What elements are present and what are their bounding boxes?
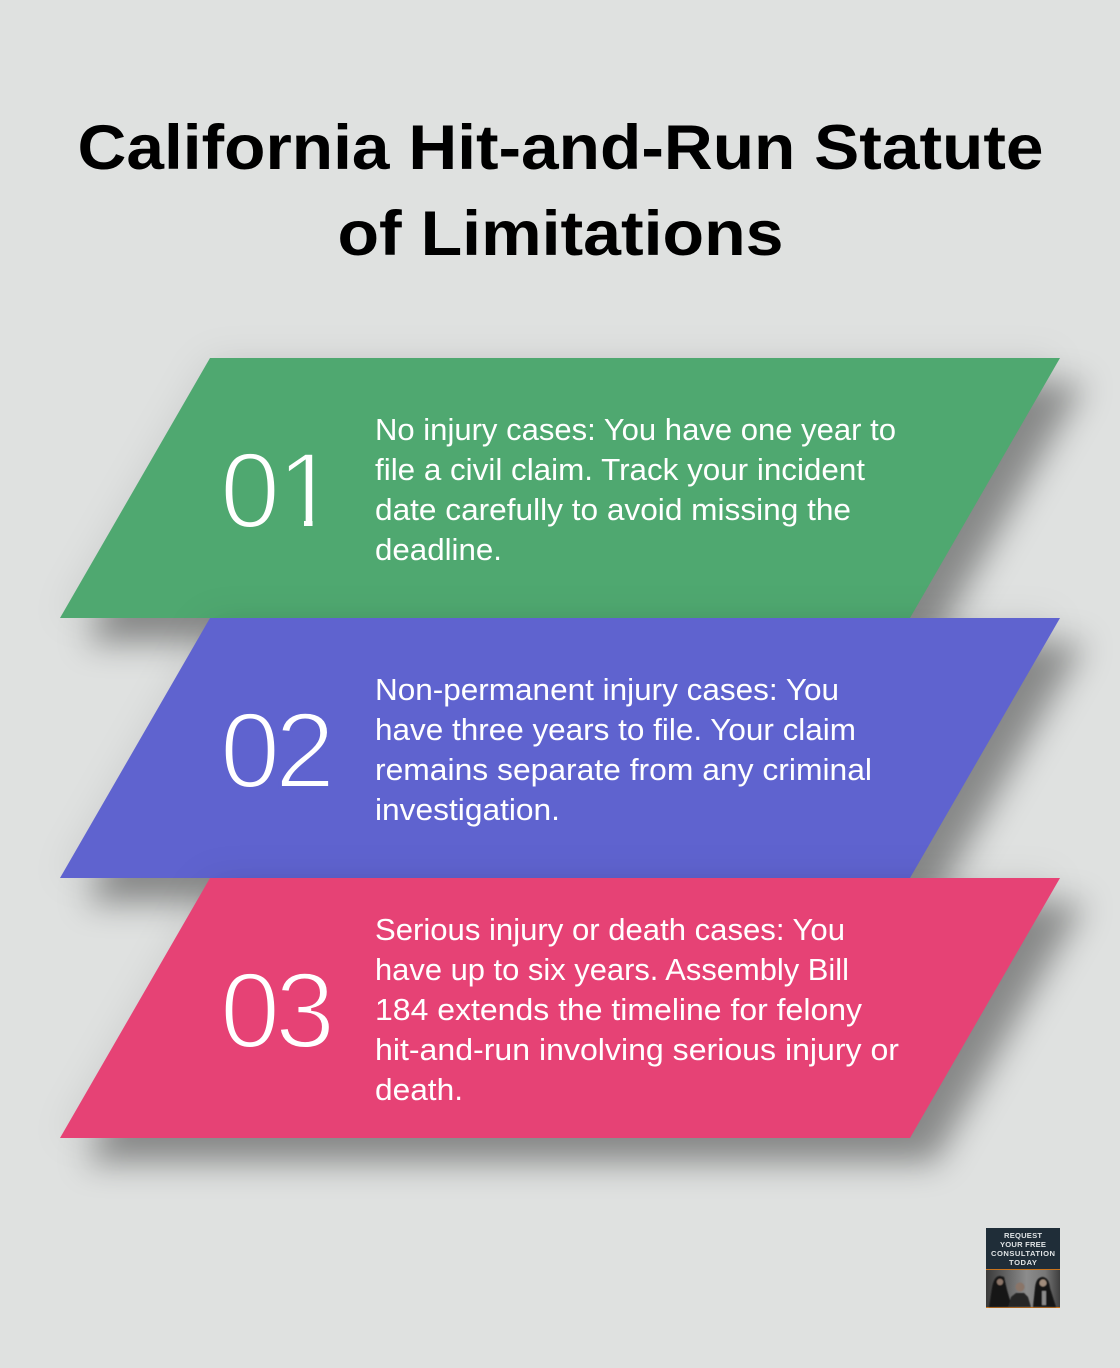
text: serious injury or death cases: 184 extends the timeline for felony: [375, 992, 863, 1027]
title: [78, 113, 1044, 269]
number 01: 01: [220, 430, 337, 550]
text: non-permanent injury cases: [375, 672, 872, 827]
number 03: 03: [220, 950, 335, 1070]
text: no injury cases: deadline.: [375, 532, 502, 567]
text: non-permanent injury cases: remains separate from any criminal: [375, 752, 872, 787]
panel: step 03: [60, 878, 1085, 1163]
text: no injury cases: [375, 412, 896, 567]
logo badge: request your free consultation today: CONSULTATION: [991, 1249, 1055, 1258]
title: California Hit-and-Run Statute: [78, 113, 1044, 183]
logo badge: request your free consultation today: REQUEST: [1004, 1231, 1042, 1240]
text: non-permanent injury cases: have three years to file. Your claim: [375, 712, 856, 747]
title: of Limitations: [338, 199, 784, 269]
text: no injury cases: file a civil claim. Track your incident: [375, 452, 865, 487]
text: non-permanent injury cases: Non-permanent injury cases: You: [375, 672, 839, 707]
logo badge: request your free consultation today: TODAY: [1009, 1258, 1037, 1267]
panel: step 01: [60, 358, 1085, 643]
text: non-permanent injury cases: investigation.: [375, 792, 560, 827]
panel: step 02: [60, 618, 1085, 903]
logo badge: request your free consultation today: [986, 1228, 1060, 1308]
text: serious injury or death cases: Serious injury or death cases: You: [375, 912, 845, 947]
text: no injury cases: No injury cases: You have one year to: [375, 412, 896, 447]
text: serious injury or death cases: death.: [375, 1072, 463, 1107]
text: serious injury or death cases: have up to six years. Assembly Bill: [375, 952, 849, 987]
number 02: 02: [220, 690, 335, 810]
text: no injury cases: date carefully to avoid missing the: [375, 492, 851, 527]
text: serious injury or death cases: hit-and-run involving serious injury or: [375, 1032, 899, 1067]
text: serious injury or death cases: [375, 912, 899, 1107]
logo badge: request your free consultation today: YOUR FREE: [1000, 1240, 1046, 1249]
